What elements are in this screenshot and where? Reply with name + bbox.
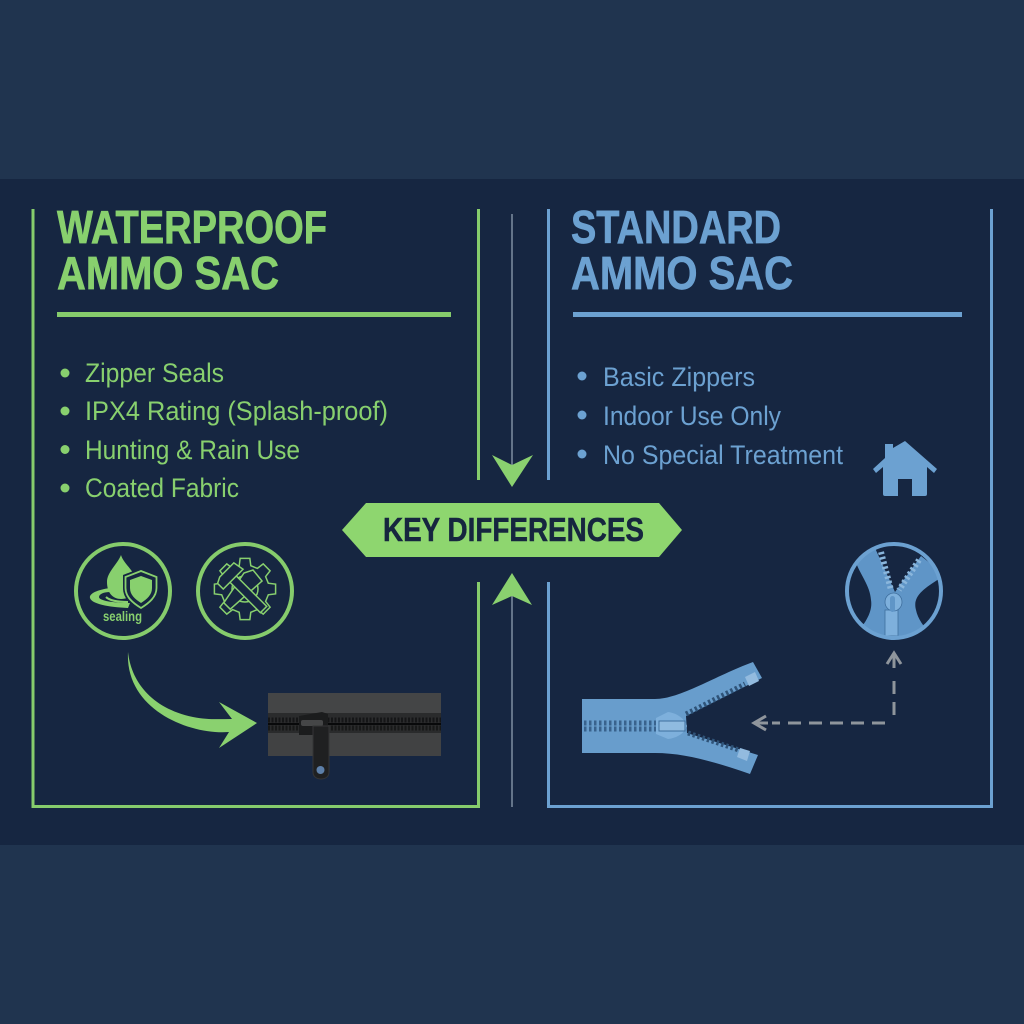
right panel frame xyxy=(548,209,992,806)
left feature list: Zipper Seals xyxy=(85,358,224,388)
arrow: down to key differences xyxy=(492,455,533,487)
left heading xyxy=(57,201,327,299)
waterproof black zipper photo xyxy=(268,693,441,779)
left heading: WATERPROOF xyxy=(57,201,327,253)
left heading rule xyxy=(57,312,451,317)
icon: sealing badge: sealing xyxy=(103,609,142,624)
standard blue zipper photo xyxy=(582,662,762,774)
arrow: up to key differences xyxy=(492,573,532,605)
right feature list xyxy=(578,362,843,470)
left feature list: Hunting & Rain Use xyxy=(85,435,300,465)
right heading: STANDARD xyxy=(571,201,781,253)
central dark band xyxy=(0,179,1024,845)
panel: standard ammo sac xyxy=(548,201,992,806)
icon: gear and tools badge xyxy=(198,544,292,638)
right feature list: Indoor Use Only xyxy=(603,401,781,431)
left feature list: Coated Fabric xyxy=(85,473,239,503)
right heading: AMMO SAC xyxy=(571,247,793,299)
center divider line xyxy=(511,214,513,807)
right feature list: Basic Zippers xyxy=(603,362,755,392)
left feature list xyxy=(60,358,388,503)
right heading rule xyxy=(573,312,962,317)
banner: key differences xyxy=(342,503,682,557)
left heading: AMMO SAC xyxy=(57,247,279,299)
icon: house xyxy=(873,441,937,496)
left panel frame xyxy=(33,209,478,806)
right heading xyxy=(571,201,793,299)
icon: sealing badge xyxy=(76,544,170,638)
zipper detail badge xyxy=(847,544,945,640)
left feature list: IPX4 Rating (Splash-proof) xyxy=(85,396,388,426)
banner: key differences: KEY DIFFERENCES xyxy=(383,511,644,548)
dashed arrows between zippers xyxy=(754,653,901,730)
arrow: sealing to zipper xyxy=(128,652,257,748)
right feature list: No Special Treatment xyxy=(603,440,843,470)
panel: waterproof ammo sac xyxy=(33,201,478,806)
